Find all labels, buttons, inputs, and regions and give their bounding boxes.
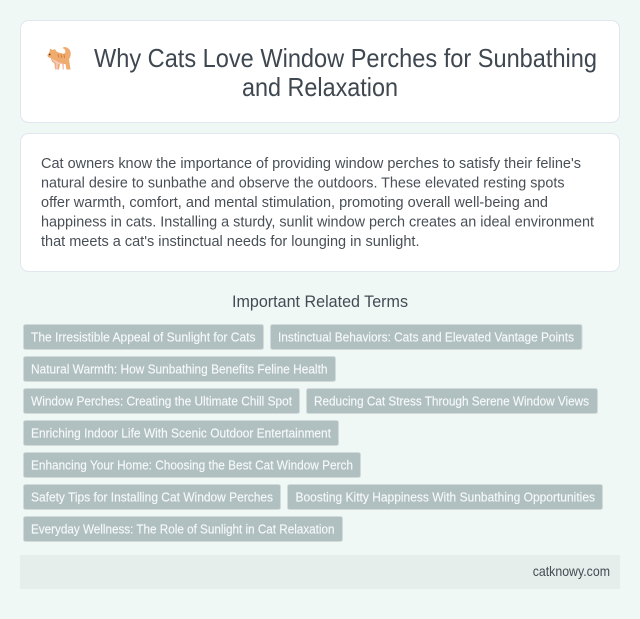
heading: related terms: Important Related Terms	[232, 292, 408, 311]
tag: Everyday Wellness: The Role of Sunlight in Cat Relaxation	[31, 522, 334, 536]
tag	[24, 516, 342, 542]
tag	[24, 484, 280, 510]
tag: Enhancing Your Home: Choosing the Best Cat Window Perch	[31, 458, 353, 472]
tag	[24, 324, 264, 350]
intro text: that meets a cat's instinctual needs for lounging in sunlight.	[41, 233, 420, 250]
tag: Boosting Kitty Happiness With Sunbathing Opportunities	[296, 490, 595, 504]
tag	[24, 420, 338, 446]
footer site name: catknowy.com	[533, 564, 610, 579]
tag	[306, 388, 598, 414]
footer bar	[20, 555, 620, 589]
tag: Window Perches: Creating the Ultimate Chill Spot	[31, 394, 292, 408]
intro text	[41, 155, 595, 250]
tag	[24, 388, 300, 414]
intro text: Cat owners know the importance of providing window perches to satisfy their feline's	[41, 155, 581, 172]
panel: intro paragraph card	[20, 134, 620, 272]
tag	[270, 324, 582, 350]
tag: Enriching Indoor Life With Scenic Outdoor Entertainment	[31, 426, 331, 440]
tag	[24, 452, 360, 478]
tag: Safety Tips for Installing Cat Window Perches	[31, 490, 273, 504]
tag: Natural Warmth: How Sunbathing Benefits Feline Health	[31, 362, 328, 376]
intro text: natural desire to sunbathe and observe the outdoors. These elevated resting spots	[41, 174, 565, 192]
title	[94, 43, 597, 102]
tag: The Irresistible Appeal of Sunlight for Cats	[31, 330, 256, 344]
panel: title card	[20, 20, 620, 122]
intro text: offer warmth, comfort, and mental stimulation, promoting overall well-being and	[41, 194, 548, 211]
tag: Instinctual Behaviors: Cats and Elevated Vantage Points	[278, 330, 574, 344]
icon: cat	[47, 47, 71, 70]
title: Why Cats Love Window Perches for Sunbathing	[94, 43, 597, 73]
related term tags	[24, 324, 602, 542]
tag	[288, 484, 602, 510]
title: and Relaxation	[242, 72, 398, 102]
tag	[24, 356, 336, 382]
intro text: happiness in cats. Installing a sturdy, sunlit window perch creates an ideal environment	[41, 214, 595, 230]
tag: Reducing Cat Stress Through Serene Window Views	[314, 394, 589, 408]
